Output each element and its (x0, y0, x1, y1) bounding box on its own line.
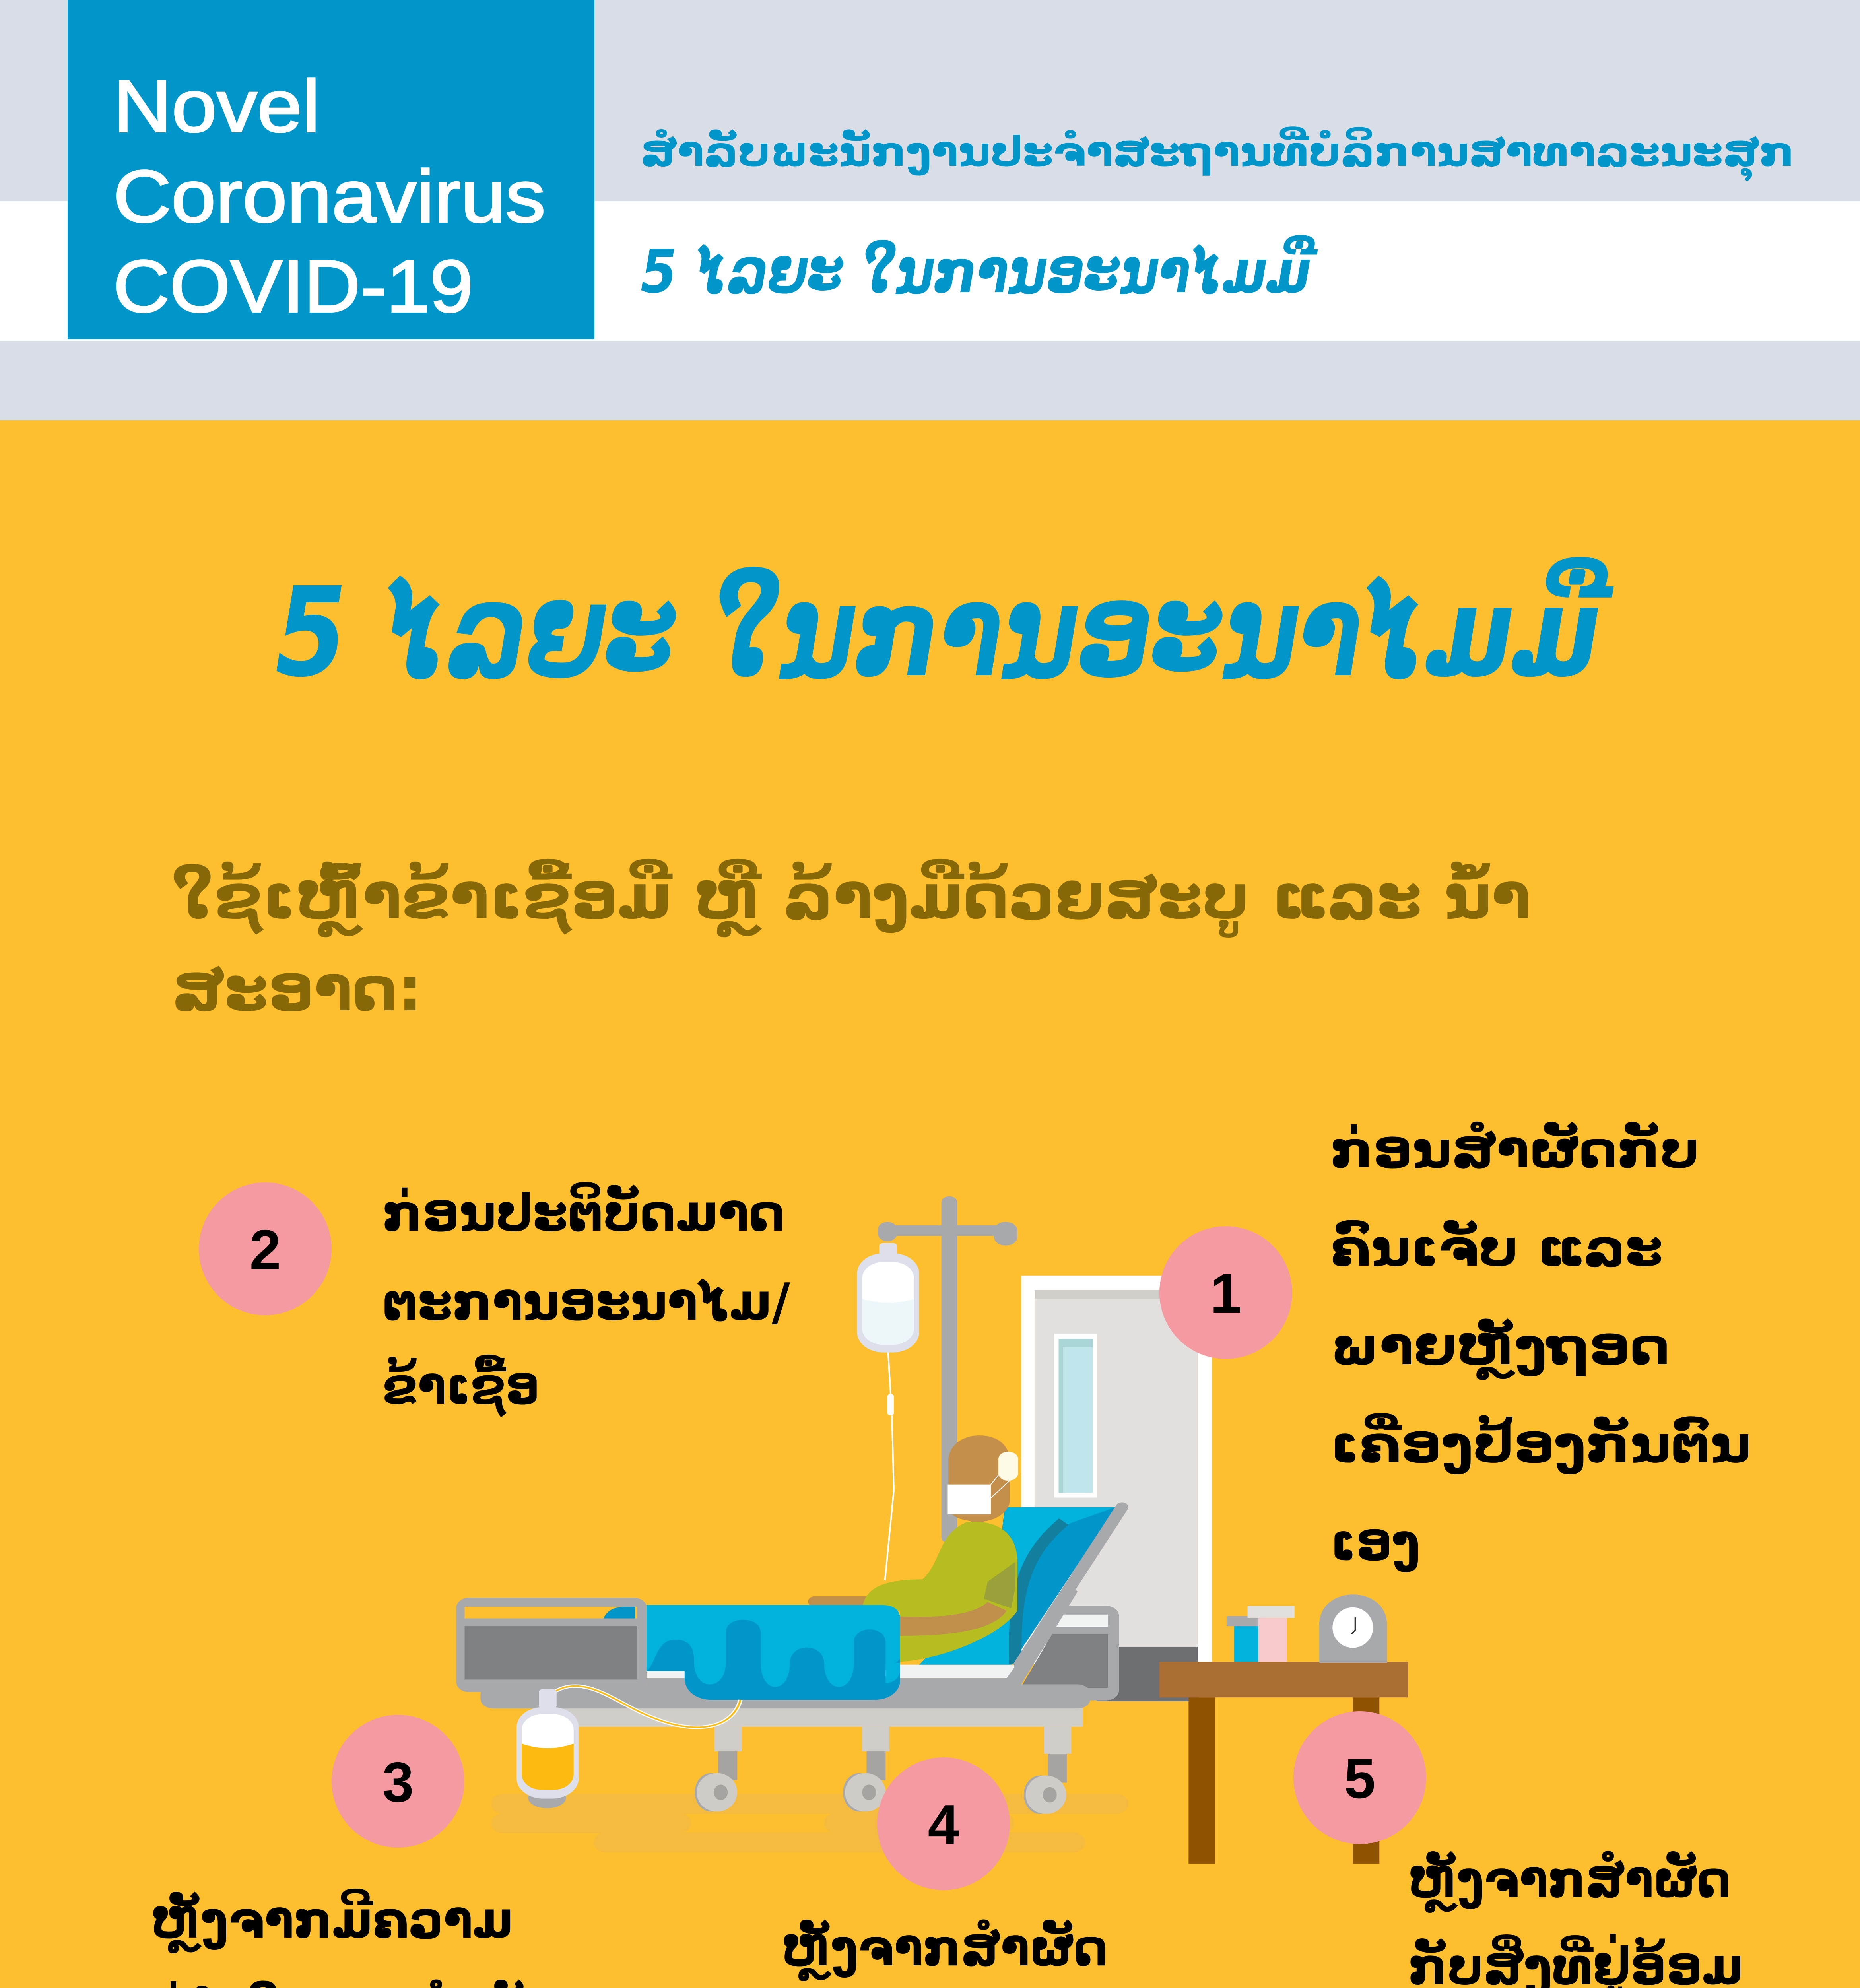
moment 5 text: ຫຼັງຈາກສຳຜັດ (1408, 1850, 1731, 1913)
door (1021, 1276, 1212, 1701)
moment 1 text: ເຄື່ອງປ້ອງກັນຕົນ (1330, 1413, 1751, 1474)
moment 1 text (1330, 1120, 1751, 1572)
moment 1 text: ພາຍຫຼັງຖອດ (1330, 1317, 1670, 1380)
urine bag and tube (516, 1686, 740, 1808)
moment 3 text: ຫຼັງຈາກມີຄວາມ (151, 1889, 513, 1953)
moment 3 text (151, 1889, 558, 1988)
number badge 5: 5 (1344, 1747, 1375, 1810)
number badge 1: 1 (1210, 1262, 1241, 1325)
title: Novel Coronavirus COVID-19 (113, 65, 546, 328)
moment 1 text: ເອງ (1330, 1513, 1420, 1572)
IV pole (878, 1196, 1017, 1543)
patient (808, 1435, 1018, 1662)
number badge 2: 2 (250, 1218, 281, 1281)
header subtitle: topic: 5 ໄລຍະ ໃນການອະນາໄມມື (641, 235, 1318, 307)
title: Novel Coronavirus COVID-19: COVID-19 (113, 245, 473, 328)
number badge 4 (877, 1757, 1010, 1890)
blanket (647, 1605, 900, 1700)
title: Novel Coronavirus COVID-19: Novel (113, 65, 320, 148)
backrest (919, 1507, 1122, 1678)
moment 1 text: ກ່ອນສຳຜັດກັບ (1330, 1120, 1699, 1180)
moment 2 text: ຂ້າເຊື້ອ (382, 1355, 540, 1417)
number badge 5 (1293, 1711, 1426, 1844)
main heading: 5 ໄລຍະ ໃນການອະນາໄມມື (275, 556, 1614, 705)
sub heading: ສະອາດ: (172, 953, 423, 1025)
moment 4 text: ຫຼັງຈາກສຳຜັດ (782, 1918, 1108, 1981)
cups (1234, 1625, 1258, 1662)
header subtitle: audience: ສຳລັບພະນັກງານປະຈຳສະຖານທີ່ບໍລິການສາທາລະນະສຸກ (641, 127, 1794, 182)
bed legs and wheels (695, 1727, 1071, 1814)
number badge 1 (1159, 1226, 1292, 1359)
moment 2 text: ຕະການອະນາໄມ/ (382, 1273, 790, 1332)
clock (1319, 1594, 1387, 1663)
header band (0, 0, 1860, 341)
number badge 2 (199, 1182, 332, 1315)
bed head board left (456, 1598, 647, 1692)
yellow main panel (0, 420, 1860, 1988)
number badge 4: 4 (928, 1793, 959, 1856)
bed frame (480, 1587, 1090, 1727)
moment 2 text: ກ່ອນປະຕິບັດມາດ (382, 1182, 785, 1243)
bedside table (1159, 1594, 1408, 1864)
sub heading (172, 859, 1531, 1025)
illustration: patient in hospital bed (456, 1196, 1408, 1864)
floor shadows (491, 1794, 1128, 1852)
IV bag and line (857, 1243, 919, 1580)
moment 1 text: ຄົນເຈັບ ແລະ (1330, 1219, 1663, 1278)
blue title box (68, 0, 594, 339)
moment 5 text (1408, 1850, 1744, 1988)
number badge 3: 3 (382, 1751, 414, 1814)
sub heading: ໃຊ້ເຫຼົ້າຂ້າເຊື້ອມື ຫຼື ລ້າງມືດ້ວຍສະບູ ແລະ ນໍ້າ (172, 859, 1531, 938)
number badge 3 (332, 1715, 464, 1848)
face mask (947, 1485, 991, 1514)
title: Novel Coronavirus COVID-19: Coronavirus (113, 155, 546, 238)
moment 2 text (382, 1182, 790, 1417)
bed foot board right (1021, 1606, 1119, 1700)
